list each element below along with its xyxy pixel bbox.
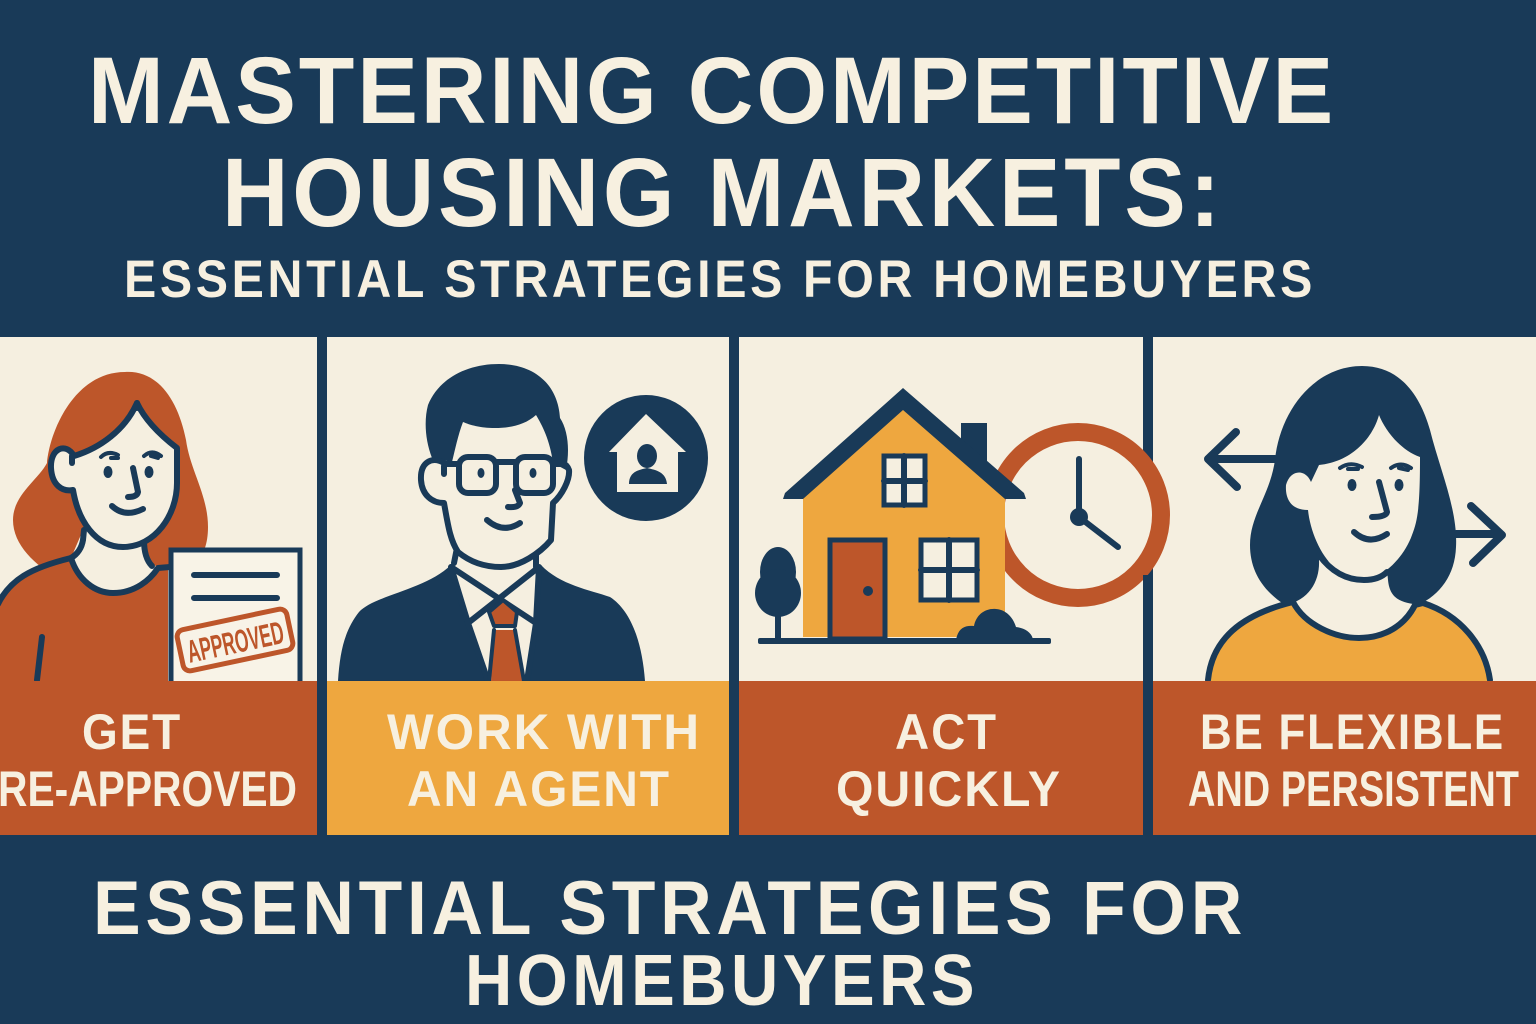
document with stamp <box>171 550 300 684</box>
label: get pre-approved <box>0 681 317 835</box>
title <box>88 38 1336 247</box>
label: act quickly: ACT <box>895 704 998 760</box>
illustration: agent with glasses <box>338 364 708 681</box>
illustration: flexible woman <box>1207 366 1502 681</box>
illustration: woman with approved letter <box>0 372 300 684</box>
panel: work with an agent <box>327 337 729 681</box>
bottom heading: HOMEBUYERS <box>465 941 979 1021</box>
bottom heading <box>93 866 1247 1021</box>
document with stamp: APPROVED <box>184 614 287 670</box>
label: act quickly <box>739 681 1143 835</box>
label: be flexible and persistent <box>1153 681 1536 835</box>
label: act quickly: QUICKLY <box>836 761 1062 817</box>
panel: be flexible <box>1143 337 1502 681</box>
label: work with an agent: WORK WITH <box>387 704 701 760</box>
panel: get pre-approved <box>0 337 317 684</box>
label: get pre-approved: RE-APPROVED <box>0 761 297 817</box>
label: get pre-approved: GET <box>82 704 182 760</box>
illustration: house <box>755 388 1051 644</box>
title: HOUSING MARKETS: <box>222 138 1224 247</box>
bottom heading: ESSENTIAL STRATEGIES FOR <box>93 866 1247 951</box>
label: work with an agent: AN AGENT <box>407 761 671 817</box>
icon: house badge <box>584 395 708 521</box>
icon: clock <box>995 432 1161 598</box>
subtitle: ESSENTIAL STRATEGIES FOR HOMEBUYERS <box>124 250 1316 309</box>
panel: act quickly <box>739 337 1536 681</box>
title: MASTERING COMPETITIVE <box>88 38 1336 144</box>
label: work with an agent <box>327 681 729 835</box>
